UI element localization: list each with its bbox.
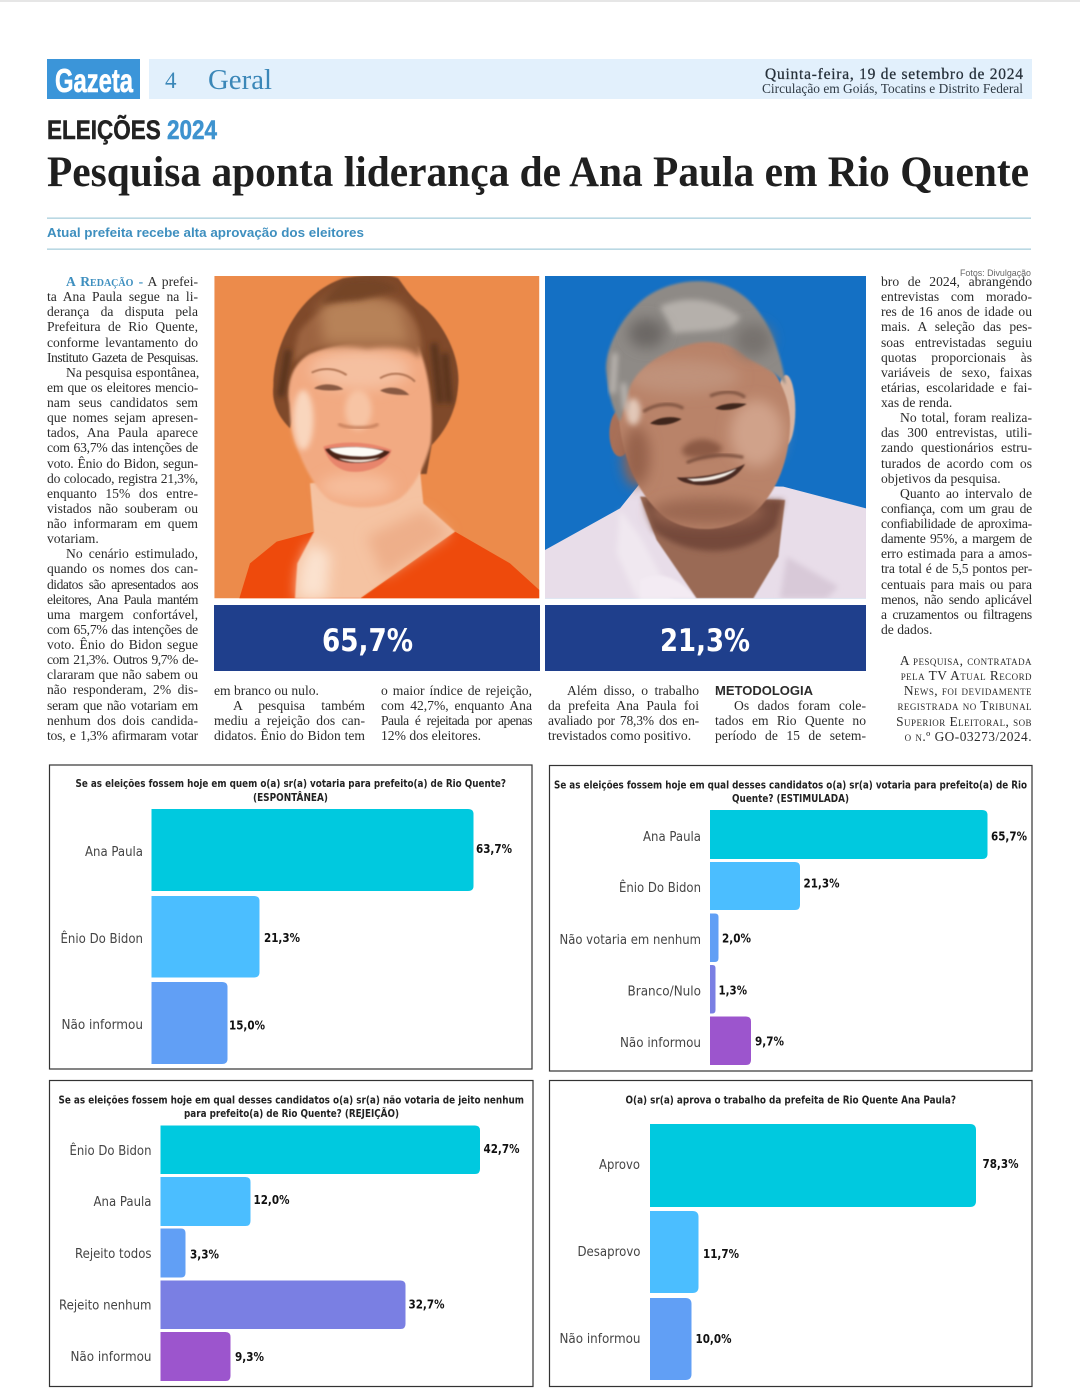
article column 6: erro estimada para a amos- (881, 546, 1032, 561)
article column 1: ta Ana Paula segue na li- (47, 289, 198, 304)
article column 4: Além disso, o trabalho (567, 682, 699, 698)
article column 1: A Redação - A prefei- (66, 274, 198, 289)
bar: Ênio Do Bidon 42,7% (70, 1126, 520, 1174)
registration note: News, foi devidamente (904, 683, 1032, 698)
bar: Não votaria em nenhum 2,0%: 2,0% (722, 930, 751, 946)
article column 3: 12% dos eleitores. (381, 728, 481, 743)
bar: Rejeito todos 3,3% (75, 1228, 219, 1278)
article column 1: conforme levantamento do (47, 334, 198, 350)
article column 3: o maior índice de rejeição, (381, 682, 532, 698)
article column 6: confiança, com um grau de (881, 501, 1032, 516)
article column 6: variáveis de sexo, faixas (881, 365, 1032, 380)
article column 1: voto. Ênio do Bidon, segun- (47, 456, 198, 470)
bar: Branco/Nulo 1,3% (628, 965, 747, 1014)
article column 1: eleitores, Ana Paula mantém (47, 592, 198, 607)
bar: Ênio Do Bidon 21,3%: Ênio Do Bidon (60, 931, 143, 947)
chart title (554, 780, 1027, 805)
article column 6: damente 95%, a margem de (881, 531, 1032, 546)
article column 1: que nomes sejam apresen- (47, 410, 198, 425)
article column 3 (381, 682, 532, 743)
article column 1: não responderam, 2% dis- (47, 682, 198, 697)
article column 6: zando questionários estru- (881, 440, 1032, 455)
article column 1: Na pesquisa espontânea, (66, 365, 199, 380)
bar: Não informou 9,7%: 9,7% (755, 1034, 784, 1048)
bar: Branco/Nulo 1,3%: Branco/Nulo (628, 984, 701, 1000)
article column 1: não informaram em quem (47, 516, 198, 531)
article column 6: res de 16 anos de idade ou (881, 304, 1032, 319)
registration note: o n.º GO-03273/2024. (905, 729, 1032, 744)
article column 3: com 42,7%, enquanto Ana (381, 698, 532, 713)
article column 1: uma margem confortável, (47, 607, 198, 622)
bar: Ênio Do Bidon 21,3%: 21,3% (804, 876, 840, 890)
chart title: Quente? (ESTIMULADA) (732, 793, 849, 805)
bar: Não votaria em nenhum 2,0%: Não votaria em nenhum (560, 933, 701, 948)
panel: stimulated voting intention chart (550, 766, 1032, 1071)
bar: Ana Paula 63,7%: Ana Paula (85, 845, 143, 860)
article column 6: No total, foram realiza- (900, 410, 1032, 425)
bar: Ana Paula 65,7% (643, 810, 1027, 859)
bar: Não informou 9,7%: Não informou (620, 1036, 701, 1051)
bar: Rejeito nenhum 32,7% (59, 1280, 445, 1329)
article column 2: em branco ou nulo. (214, 682, 319, 698)
bar: Ana Paula 65,7%: 65,7% (991, 828, 1027, 844)
bar: Rejeito todos 3,3%: 3,3% (190, 1246, 219, 1262)
chart title: Se as eleições fossem hoje em quem o(a) sr(a) votaria para prefeito(a) de Rio Quente? (76, 778, 506, 790)
article column 6: Quanto ao intervalo de (900, 486, 1032, 501)
article column 6: xas de renda. (881, 395, 952, 410)
article column 1: em que os eleitores mencio- (47, 380, 198, 395)
bar: Ana Paula 12,0%: Ana Paula (94, 1195, 152, 1210)
bar: Não informou 15,0%: 15,0% (229, 1018, 265, 1032)
article column 1: tados, Ana Paula aparece (47, 425, 198, 440)
chart title (58, 1094, 524, 1120)
bar: Ana Paula 63,7% (85, 809, 512, 891)
section bar: Quinta-feira, 19 de setembro de 2024 (765, 66, 1023, 83)
section heading: METODOLOGIA (715, 682, 813, 698)
article column 6: turados de acordo com os (881, 456, 1032, 470)
article column 1: Prefeitura de Rio Quente, (47, 319, 198, 334)
article column 1: do colocado, registra 21,3%, (47, 471, 198, 486)
article column 2: didatos. Ênio do Bidon tem (214, 728, 365, 743)
article column 1: enquanto 15% dos entre- (47, 486, 198, 501)
panel: spontaneous voting intention chart (50, 765, 532, 1069)
article column 1: votariam. (47, 531, 99, 546)
article column 6: soas entrevistadas seguiu (881, 334, 1032, 350)
article column 5: metodologia: período de 15 de setem- (715, 728, 866, 743)
bar: Branco/Nulo 1,3%: 1,3% (718, 982, 747, 998)
section bar: 4 (165, 68, 177, 93)
article column 1: com 21,3%. Outros 9,7% de- (47, 652, 198, 667)
article column 1: com 65,7% das intenções de (47, 622, 198, 637)
article column 6: confiabilidade de aproxima- (881, 516, 1032, 531)
article column 6: a cruzamentos ou filtragens (881, 607, 1032, 622)
bar: Não informou 10,0% (560, 1298, 732, 1380)
article column 1: vistados não souberam ou (47, 501, 198, 516)
bar: Ana Paula 12,0% (94, 1177, 290, 1226)
photo: Ênio do Bidon (545, 276, 866, 598)
article column 1: seram que não votariam em (47, 698, 198, 712)
article column 1: nam seus candidatos sem (47, 395, 198, 410)
article column 2: mediu a rejeição dos can- (214, 713, 365, 728)
vote share bar: Ana Paula: 65,7% (322, 623, 413, 659)
bar: Não informou 15,0% (62, 982, 265, 1064)
registration note: A pesquisa, contratada (900, 653, 1032, 668)
article column 6: entrevistas com morado- (881, 289, 1032, 304)
logo: Gazeta: Gazeta (55, 62, 133, 99)
subheadline: Atual prefeita recebe alta aprovação dos eleitores (47, 225, 364, 240)
bar: Não informou 10,0%: 10,0% (696, 1331, 732, 1346)
panel: approval chart (550, 1080, 1032, 1386)
chart title: para prefeito(a) de Rio Quente? (REJEIÇÃO) (184, 1107, 399, 1120)
registration note: registrada no Tribunal (897, 698, 1032, 713)
article column 5: metodologia: tados em Rio Quente no (715, 713, 866, 728)
section bar (149, 59, 1032, 99)
chart title: O(a) sr(a) aprova o trabalho da prefeita de Rio Quente Ana Paula? (626, 1094, 956, 1106)
bar: Ênio Do Bidon 21,3% (60, 896, 300, 978)
bar: Desaprovo 11,7% (578, 1211, 739, 1293)
bar: Não informou 9,3%: 9,3% (235, 1349, 264, 1364)
headline: Pesquisa aponta liderança de Ana Paula em Rio Quente (47, 148, 1029, 196)
article column 1: com 63,7% das intenções de (47, 440, 198, 455)
vote share bar: Ana Paula (214, 605, 540, 671)
bar: Aprovo 78,3%: Aprovo (599, 1158, 640, 1173)
bar: Rejeito todos 3,3%: Rejeito todos (75, 1247, 152, 1262)
article column 6: tra total é de 5,5 pontos per- (881, 561, 1032, 576)
registration note: Superior Eleitoral, sob (896, 714, 1032, 728)
article column 1: No cenário estimulado, (66, 546, 198, 561)
bar: Ênio Do Bidon 21,3%: 21,3% (264, 930, 300, 945)
article column 6: menos, não sendo aplicável (881, 592, 1032, 607)
article column 3: Paula é rejeitada por apenas (381, 713, 532, 728)
article column 4: avaliado por 78,3% dos en- (548, 713, 699, 728)
bar: Não informou 9,3%: Não informou (70, 1350, 152, 1365)
kicker: Eleições 2024: ELEIÇÕES 2024 (47, 114, 217, 145)
article column 1: didatos são apresentados aos (47, 576, 198, 592)
photo credit: Fotos: Divulgação (960, 268, 1031, 278)
bar: Desaprovo 11,7%: Desaprovo (578, 1245, 641, 1260)
article column 6: objetivos da pesquisa. (881, 471, 1001, 486)
bar: Rejeito nenhum 32,7%: Rejeito nenhum (59, 1298, 152, 1314)
vote share bar: Ênio do Bidon (545, 605, 866, 671)
article column 1: Instituto Gazeta de Pesquisas. (47, 350, 198, 365)
bar: Ênio Do Bidon 21,3%: Ênio Do Bidon (619, 880, 701, 896)
article column 1: voto. Ênio do Bidon segue (47, 637, 198, 652)
article column 4: da prefeita Ana Paula foi (548, 698, 699, 713)
logo: Gazeta (47, 59, 140, 99)
article column 6: etárias, escolaridade e fai- (881, 380, 1032, 395)
bar: Ana Paula 65,7%: Ana Paula (643, 830, 701, 845)
article column 2 (214, 682, 365, 743)
article column 6: centuais para mais ou para (881, 576, 1032, 592)
bar: Aprovo 78,3% (599, 1124, 1019, 1207)
registration note: pela TV Atual Record (901, 668, 1032, 683)
bar: Ana Paula 63,7%: 63,7% (476, 841, 512, 856)
photo: Ana Paula (214, 275, 539, 598)
vote share bar: Ênio do Bidon: 21,3% (660, 623, 750, 659)
article column 1 (47, 274, 199, 743)
article column 4: trevistados como positivo. (548, 728, 691, 743)
bar: Não votaria em nenhum 2,0% (560, 914, 751, 962)
article column 1: tos, e 1,3% afirmaram votar (47, 728, 198, 743)
article column 2: A pesquisa também (233, 698, 365, 713)
article column 6: bro de 2024, abrangendo (881, 274, 1032, 289)
article column 1: quando os nomes dos can- (47, 561, 198, 576)
article column 4 (548, 682, 699, 743)
bar: Não informou 9,7% (620, 1016, 784, 1065)
chart title (76, 778, 506, 804)
bar: Não informou 15,0%: Não informou (62, 1018, 143, 1033)
bar: Ana Paula 12,0%: 12,0% (254, 1192, 290, 1207)
article column 5: metodologia (715, 682, 866, 743)
section bar: Geral (208, 64, 272, 96)
bar: Ênio Do Bidon 42,7%: Ênio Do Bidon (70, 1143, 152, 1159)
bar: Ênio Do Bidon 42,7%: 42,7% (484, 1141, 520, 1156)
section bar: Circulação em Goiás, Tocatins e Distrito Federal (762, 81, 1023, 96)
chart title: Se as eleições fossem hoje em qual desses candidatos o(a) sr(a) não votaria de jeito nenhum (58, 1094, 524, 1106)
panel: rejection chart (50, 1080, 533, 1386)
article column 5: metodologia: Os dados foram cole- (734, 698, 866, 713)
chart title: (ESPONTÂNEA) (253, 791, 328, 804)
bar: Ênio Do Bidon 21,3% (619, 862, 840, 910)
masthead (47, 59, 1032, 99)
bar: Aprovo 78,3%: 78,3% (982, 1156, 1019, 1171)
article column 1: derança da disputa pela (47, 304, 198, 319)
article column 1: nenhum dos dois candida- (47, 713, 198, 728)
article column 6: de dados. (881, 622, 932, 637)
bar: Não informou 10,0%: Não informou (560, 1332, 640, 1347)
article column 6: mais. A seleção das pes- (881, 319, 1032, 334)
registration note (896, 653, 1032, 744)
bar: Não informou 9,3% (70, 1332, 264, 1381)
article column 6: das 300 entrevistas, utili- (881, 425, 1032, 440)
bar: Rejeito nenhum 32,7%: 32,7% (408, 1296, 445, 1312)
article column 6 (881, 274, 1032, 637)
bar: Desaprovo 11,7%: 11,7% (703, 1246, 739, 1261)
article column 1: clararam que não sabem ou (47, 667, 198, 682)
article column 6: quotas proporcionais às (881, 350, 1032, 365)
